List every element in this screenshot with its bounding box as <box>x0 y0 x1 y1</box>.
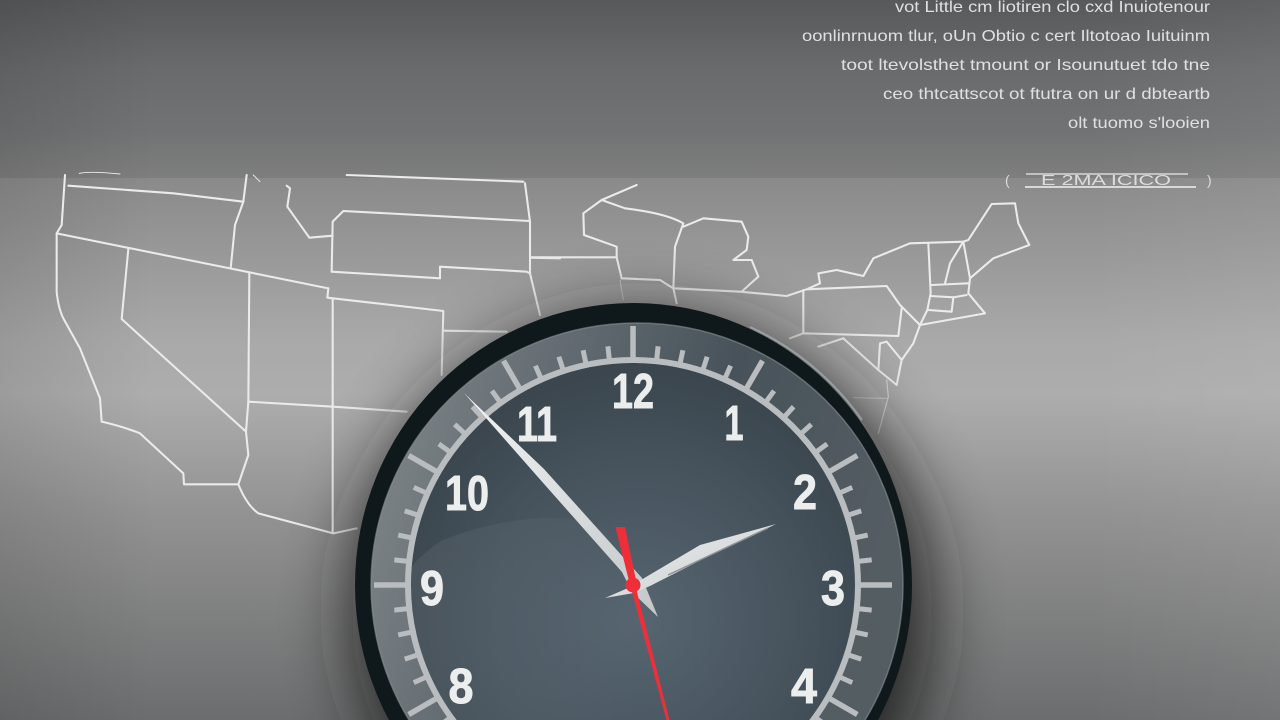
button label: E 2MA ICICO <box>1041 172 1171 189</box>
hour numerals: 4 <box>791 660 817 714</box>
text block: right-aligned paragraph: oonlinrnuom tlur, oUn Obtio c cert Iltotoao Iuituinm <box>802 28 1210 45</box>
hour numerals: 2 <box>793 466 817 520</box>
hour numerals: 12 <box>612 365 654 419</box>
background lower band <box>0 178 1280 720</box>
hour numerals: 1 <box>724 397 744 451</box>
hour numerals: 3 <box>821 562 845 616</box>
rim highlight <box>750 327 862 420</box>
hour numerals: 8 <box>448 660 474 714</box>
map: eastern United States outlines <box>530 185 1029 433</box>
hour hand <box>605 524 776 598</box>
clock rim <box>355 303 912 720</box>
text block: right-aligned paragraph: toot ltevolsthet tmount or Isounutuet tdo tne <box>841 57 1210 74</box>
hour numerals: 9 <box>420 562 444 616</box>
hour numerals: 10 <box>445 467 489 521</box>
map: western and central United States outlines <box>57 172 560 533</box>
background upper band <box>0 0 1280 178</box>
button label: ( <box>1005 172 1010 188</box>
center hub <box>626 578 640 592</box>
clock face <box>408 360 858 720</box>
clock <box>355 303 912 720</box>
clock bezel glass <box>371 323 903 720</box>
button label: ) <box>1207 172 1212 188</box>
hour numerals <box>420 365 845 714</box>
second hand <box>616 527 670 720</box>
button label <box>1005 172 1212 189</box>
hour numerals: 11 <box>517 398 557 452</box>
text block: right-aligned paragraph <box>802 0 1211 132</box>
tick ring <box>360 312 906 720</box>
text block: right-aligned paragraph: ceo thtcattscot ot ftutra on ur d dbteartb <box>883 86 1210 103</box>
clock drop shadow <box>352 314 932 720</box>
text block: right-aligned paragraph: olt tuomo s'looien <box>1068 115 1210 132</box>
gloss arc on face <box>411 526 490 720</box>
minute hand <box>464 393 658 617</box>
